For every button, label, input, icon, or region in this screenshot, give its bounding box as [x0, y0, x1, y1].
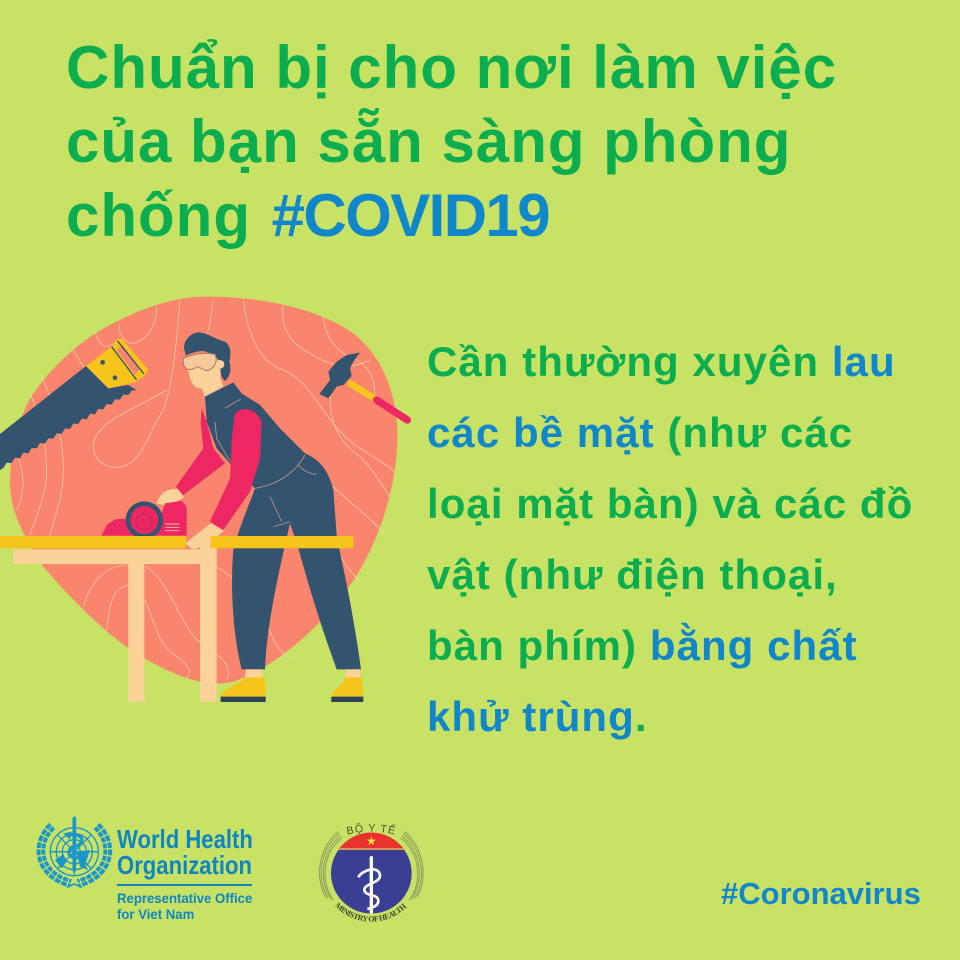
face and neck [187, 352, 225, 397]
icon: saw [0, 338, 148, 470]
front arm [210, 409, 262, 530]
person [157, 332, 363, 702]
WHO office text: for Viet Nam [117, 906, 194, 922]
Ministry of Health logo [319, 823, 424, 922]
WHO office text: Representative Office [117, 890, 252, 906]
Ministry of Health logo: MINISTRY OF HEALTH [335, 902, 407, 922]
salmon blob with wood grain [10, 297, 397, 684]
icon: WHO emblem [36, 816, 112, 888]
trousers [232, 453, 361, 669]
goggles [183, 353, 216, 370]
ear [216, 360, 224, 369]
sander tool [102, 501, 187, 539]
title: Chuẩn bị cho nơi làm việc [66, 34, 837, 101]
back arm [176, 408, 225, 495]
yellow table board [0, 536, 353, 548]
hands [157, 489, 184, 507]
title: chống #COVID19 [66, 182, 549, 249]
title: của bạn sẵn sàng phòng [66, 108, 791, 175]
table top and legs [13, 547, 217, 702]
body text: vật (như điện thoại, [427, 551, 838, 598]
WHO name [117, 824, 253, 880]
body text: Cần thường xuyên lau [427, 338, 896, 385]
WHO name: World Health [117, 824, 253, 854]
icon: hammer [319, 353, 407, 420]
divider [117, 884, 252, 886]
illustration: carpenter at workbench [0, 296, 411, 702]
staff and serpent [358, 858, 380, 912]
body text: bàn phím) bằng chất [427, 622, 858, 669]
shield [331, 850, 412, 914]
hashtag: #Coronavirus [721, 876, 921, 911]
body text: loại mặt bàn) và các đồ [427, 480, 913, 527]
hair [184, 332, 230, 381]
vest [205, 382, 305, 488]
WHO logo [36, 816, 253, 922]
vest seams [215, 399, 305, 488]
WHO office text [117, 890, 252, 922]
body text: các bề mặt (như các [427, 409, 853, 456]
wreath [320, 832, 423, 900]
WHO name: Organization [117, 850, 252, 880]
body text [427, 338, 913, 740]
title [66, 34, 837, 249]
ministry text: BỘ Y TẾ [346, 823, 396, 834]
body text: khử trùng. [427, 693, 648, 740]
boots [221, 677, 266, 697]
clothing seams [270, 463, 317, 527]
